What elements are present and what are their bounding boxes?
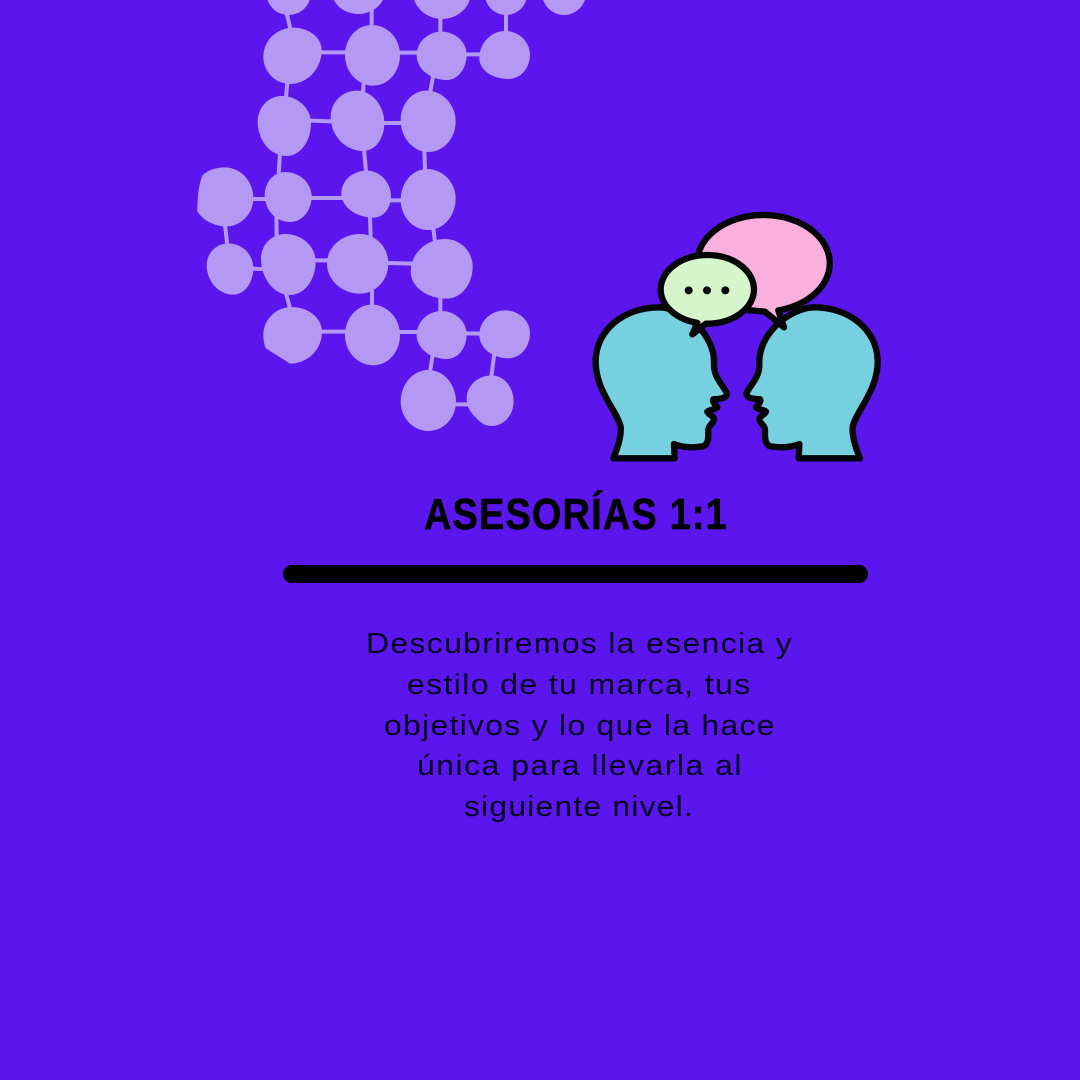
body text: Descubriremos la esencia y [366,627,793,660]
body text: única para llevarla al [417,749,742,782]
icon: green speech bubble with dots [661,255,754,334]
icon: left head [596,307,727,458]
body text: estilo de tu marca, tus [407,668,750,701]
molecular network decoration [197,0,586,431]
body text: objetivos y lo que la hace [384,709,775,742]
body text: siguiente nivel. [464,790,693,823]
body text [366,627,793,823]
icon: two heads in conversation [596,215,878,458]
icon: pink speech bubble [697,215,830,327]
title: ASESORÍAS 1:1 [424,489,727,539]
icon: right head [747,307,878,458]
divider bar [283,565,868,583]
